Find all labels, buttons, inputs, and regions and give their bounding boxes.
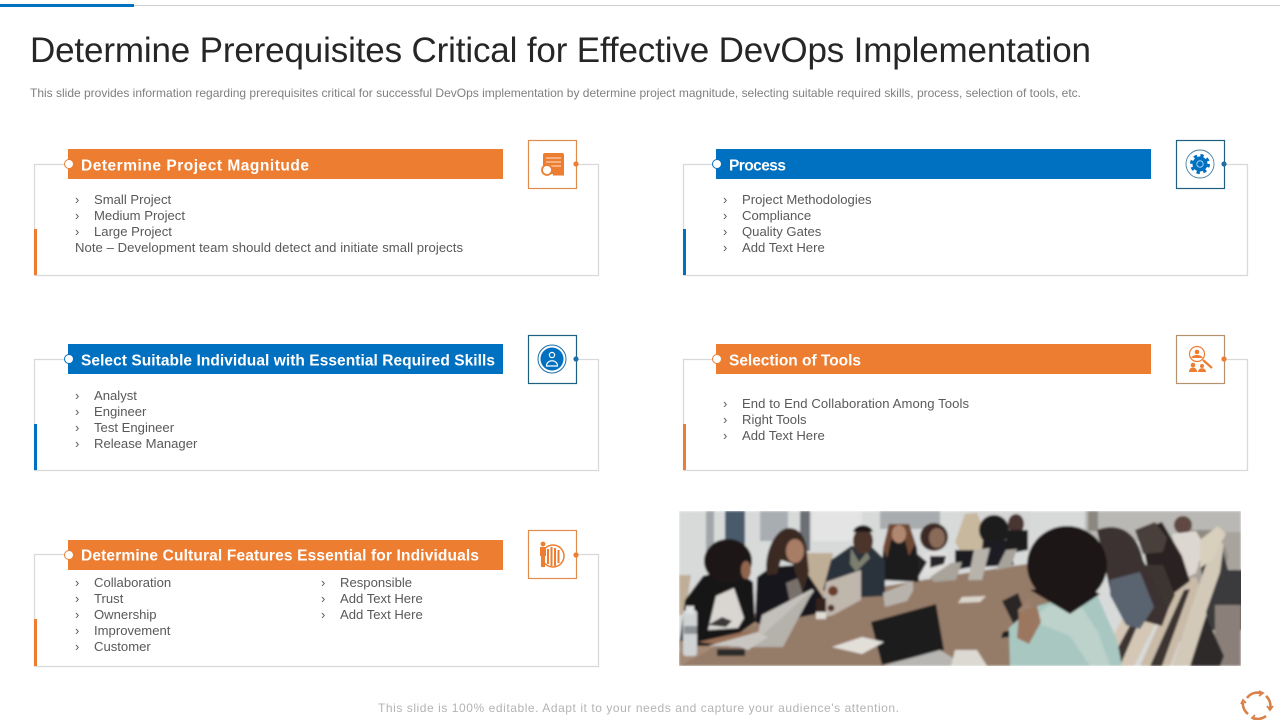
heading: select suitable individual: Select Suitable Individual with Essential Required Skills	[81, 352, 495, 370]
list: process items	[723, 192, 872, 255]
title: Determine Prerequisites Critical for Effective DevOps Implementation	[30, 31, 1091, 70]
heading: determine cultural features	[64, 540, 503, 570]
footer note: This slide is 100% editable. Adapt it to your needs and capture your audience's attention.	[378, 701, 899, 715]
list: roles: Engineer	[94, 404, 147, 419]
list: cultural features column two: Responsible	[340, 575, 412, 590]
phone	[1002, 592, 1024, 624]
back chair	[805, 553, 833, 598]
list: tools: ›	[723, 428, 727, 443]
icon: project documents	[528, 140, 579, 188]
table	[679, 562, 1080, 666]
list: process items: ›	[723, 208, 727, 223]
list: cultural features column two: Add Text Here	[340, 591, 423, 606]
list: cultural features column one: ›	[75, 575, 79, 590]
list: tools: Add Text Here	[742, 428, 825, 443]
chairs	[1114, 618, 1156, 666]
icon: orange cycle arrows	[1241, 691, 1273, 720]
woman in teal	[1009, 590, 1122, 666]
icon: people search	[1176, 336, 1227, 384]
list: cultural features column one: Trust	[94, 591, 124, 606]
list: cultural features column one: ›	[75, 607, 79, 622]
list: project sizes: Large Project	[94, 224, 172, 239]
list: cultural features column one: Ownership	[94, 607, 157, 622]
panel: determine project magnitude	[34, 140, 598, 276]
list: process items: Add Text Here	[742, 240, 825, 255]
list: cultural features column two	[321, 575, 423, 622]
list: process items: Compliance	[742, 208, 811, 223]
list: project sizes	[75, 192, 463, 255]
panel: process	[683, 140, 1248, 276]
list: cultural features column two: ›	[321, 575, 325, 590]
list: project sizes: Medium Project	[94, 208, 185, 223]
heading: determine project magnitude: Determine Project Magnitude	[81, 158, 309, 174]
list: roles: ›	[75, 404, 79, 419]
list: cultural features column one: Improvement	[94, 623, 171, 638]
list: roles	[75, 388, 198, 451]
list: tools: End to End Collaboration Among Tools	[742, 396, 969, 411]
list: process items: Quality Gates	[742, 224, 822, 239]
near paper bottom left	[951, 650, 987, 666]
list: project sizes: ›	[75, 192, 79, 207]
list: roles: Test Engineer	[94, 420, 175, 435]
icon: gear cycle	[1176, 140, 1227, 188]
list: roles: Release Manager	[94, 436, 198, 451]
list: roles: ›	[75, 420, 79, 435]
woman 2	[755, 565, 827, 627]
woman 5 and 4	[922, 552, 947, 574]
heading: determine cultural features: Determine Cultural Features Essential for Individuals	[81, 548, 479, 564]
big dark laptop	[871, 604, 944, 665]
heading: selection of tools: Selection of Tools	[729, 352, 861, 370]
heading: selection of tools	[712, 344, 1151, 374]
list: cultural features column one: Customer	[94, 639, 151, 654]
list: project sizes: ›	[75, 224, 79, 239]
list: tools: ›	[723, 396, 727, 411]
list: cultural features column two: ›	[321, 591, 325, 606]
list: process items: ›	[723, 192, 727, 207]
heading: process: Process	[729, 158, 786, 174]
panel: determine cultural features	[34, 530, 598, 666]
heading: process	[712, 149, 1151, 179]
heading: select suitable individual	[64, 344, 503, 374]
list: roles: Analyst	[94, 388, 137, 403]
woman 1	[680, 568, 755, 646]
list: cultural features column one	[75, 575, 171, 654]
heading: determine project magnitude	[64, 149, 503, 179]
man	[823, 546, 885, 598]
mid table laptops far right	[968, 548, 990, 580]
list: process items: ›	[723, 224, 727, 239]
photo: team meeting around conference table	[679, 511, 1248, 666]
icon: person with building gear	[528, 530, 579, 578]
list: tools: ›	[723, 412, 727, 427]
panel: select suitable individual	[34, 336, 598, 470]
list: tools	[723, 396, 969, 443]
list: cultural features column one: ›	[75, 591, 79, 606]
panel: selection of tools	[683, 336, 1248, 470]
seated women backs	[1144, 521, 1191, 594]
list: cultural features column one: ›	[75, 639, 79, 654]
list: process items: Project Methodologies	[742, 192, 872, 207]
list: project sizes: Small Project	[94, 192, 171, 207]
list: project sizes: Note – Development team should detect and initiate small projects	[75, 240, 463, 255]
list: project sizes: ›	[75, 208, 79, 223]
list: cultural features column two: Add Text Here	[340, 607, 423, 622]
list: roles: ›	[75, 436, 79, 451]
icon: person in gear	[528, 336, 579, 384]
laptops	[757, 587, 816, 635]
list: roles: ›	[75, 388, 79, 403]
list: cultural features column one: Collaboration	[94, 575, 171, 590]
list: cultural features column one: ›	[75, 623, 79, 638]
list: process items: ›	[723, 240, 727, 255]
papers and objects	[832, 637, 884, 654]
list: tools: Right Tools	[742, 412, 807, 427]
list: cultural features column two: ›	[321, 607, 325, 622]
description text: This slide provides information regarding prerequisites critical for successful DevOps implementation by determine project magnitude, selecting suitable required skills, process, selection of tools, etc.	[30, 86, 1081, 100]
right group of far women	[954, 512, 985, 552]
